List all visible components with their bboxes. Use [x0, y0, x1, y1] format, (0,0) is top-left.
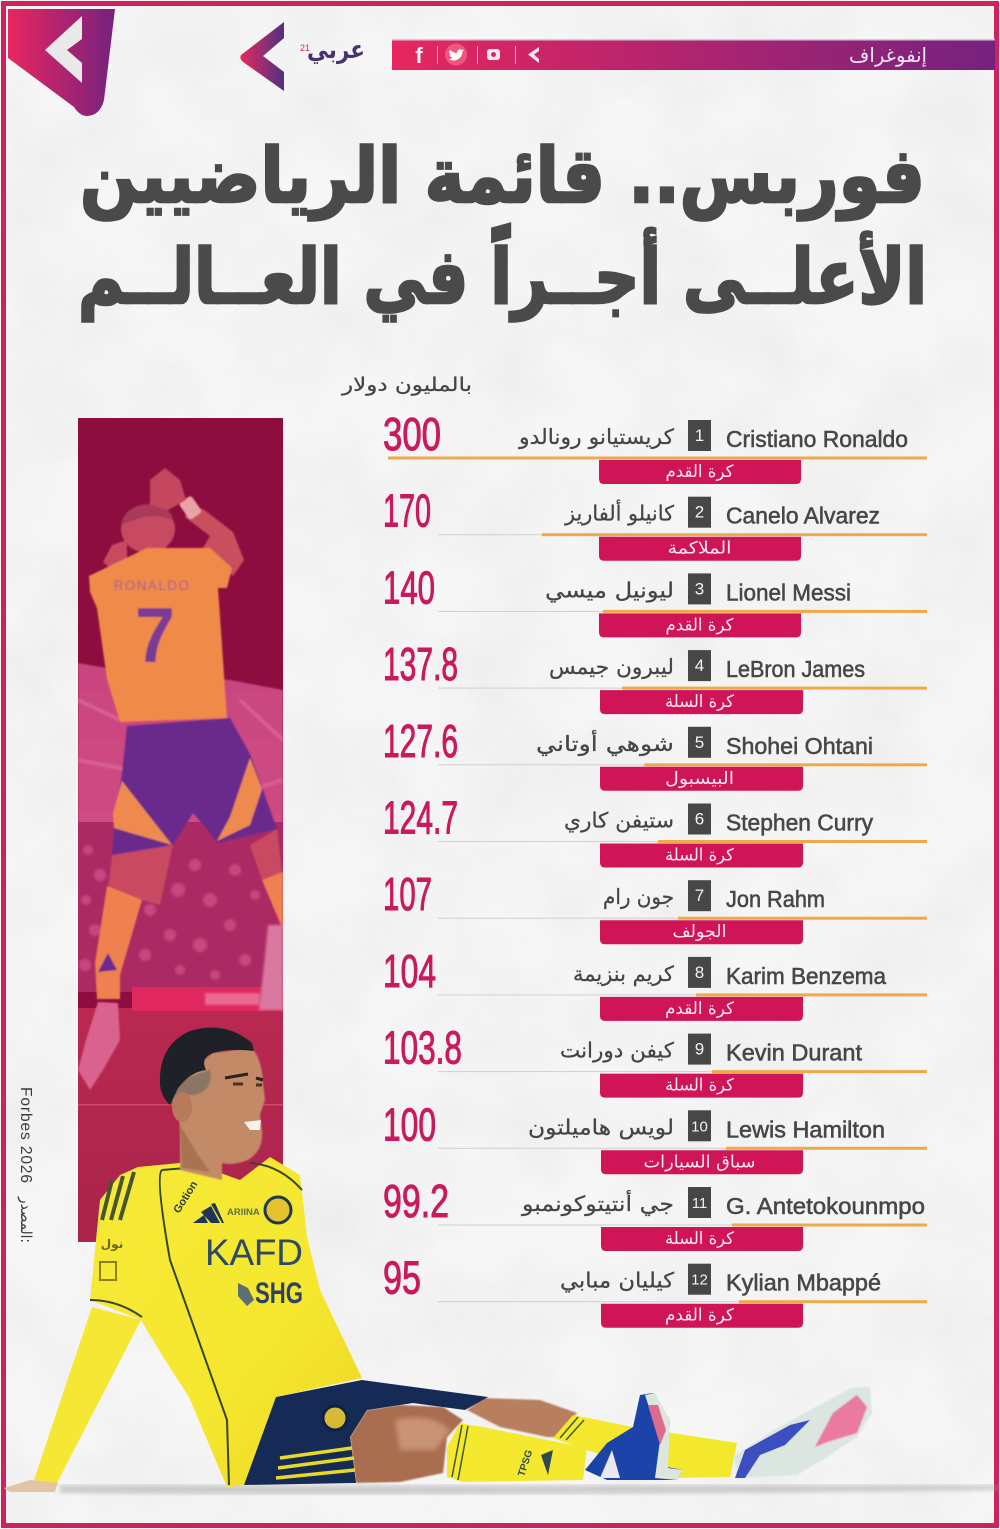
crowd — [78, 822, 283, 992]
sponsor marks: Gotion — [171, 1179, 200, 1216]
row 4: LeBron James — [726, 656, 865, 682]
row 8: كريم بنزيمة — [573, 962, 674, 987]
row 2: الملاكمة — [668, 539, 732, 559]
row 9: Kevin Durant — [726, 1040, 863, 1066]
panel: tinted photo of Ronaldo celebrating — [78, 418, 283, 1242]
brand logo: Arabi21 — [240, 22, 365, 91]
player: socks — [95, 872, 283, 999]
row 7: الجولف — [672, 922, 726, 942]
row 10: 10 — [691, 1118, 708, 1135]
row 5: Shohei Ohtani — [726, 733, 873, 759]
row 2: كانيلو ألفاريز — [564, 500, 674, 526]
player: head — [120, 515, 176, 552]
row 9: كرة السلة — [665, 1076, 735, 1096]
icon: youtube — [487, 49, 500, 60]
row 5: شوهي أوتاني — [536, 730, 674, 756]
row 3 — [383, 561, 927, 637]
row 11: 11 — [692, 1195, 707, 1212]
row 10: لويس هاميلتون — [528, 1115, 674, 1139]
row 1: 300 — [383, 408, 441, 460]
far boot — [733, 1387, 872, 1478]
player cut-out: Ronaldo sitting — [4, 1027, 1000, 1494]
row 2: 2 — [695, 503, 704, 522]
row 6: كرة السلة — [665, 846, 735, 866]
player: right arm — [185, 509, 244, 576]
row 4: كرة السلة — [665, 692, 735, 712]
brand logo: Arabi21: عربي — [307, 35, 365, 65]
player cut-out: Ronaldo sitting: ARIINA — [227, 1207, 260, 1218]
row 1: Cristiano Ronaldo — [726, 426, 908, 452]
hand — [4, 1480, 58, 1492]
sleeve patch: نول — [101, 1237, 123, 1252]
row 9: 103.8 — [383, 1022, 462, 1074]
row 11: كرة السلة — [665, 1229, 735, 1249]
player: left hand — [103, 540, 127, 568]
ear — [172, 1092, 192, 1122]
ground shadow — [60, 1485, 1000, 1494]
near boot — [585, 1393, 683, 1480]
banner — [132, 987, 283, 1011]
lower arm — [34, 1307, 141, 1483]
player: boot — [78, 1002, 120, 1090]
row 10: Lewis Hamilton — [726, 1116, 885, 1142]
ribbon label: إنفوغراف — [849, 43, 927, 68]
header ribbon — [392, 39, 995, 70]
player cut-out: Ronaldo sitting: TPSG — [516, 1448, 535, 1478]
row 8 — [383, 945, 927, 1021]
row 1: كرة القدم — [666, 462, 734, 482]
brand logo: Arabi21: 21 — [300, 43, 310, 53]
row 2: Canelo Alvarez — [726, 503, 880, 529]
far sock — [553, 1415, 737, 1478]
row 2: 170 — [383, 485, 431, 537]
celebrating player — [78, 468, 283, 1090]
player: shorts — [112, 718, 277, 855]
row 5: 127.6 — [383, 715, 458, 767]
player: legs — [108, 829, 283, 905]
row 1: كريستيانو رونالدو — [518, 425, 674, 449]
row 11: 99.2 — [383, 1175, 449, 1227]
row 11: جي أنتيتوكونمبو — [521, 1190, 674, 1216]
row 12: Kylian Mbappé — [726, 1270, 881, 1296]
near sock — [447, 1423, 587, 1482]
player cut-out: Ronaldo sitting: KAFD — [205, 1232, 303, 1273]
celebrating player: RONALDO — [114, 578, 190, 593]
icon: chevron logo — [528, 47, 539, 63]
jersey — [90, 1157, 362, 1487]
corner logo — [8, 9, 115, 116]
row 4: 137.8 — [383, 638, 458, 690]
row 11: G. Antetokounmpo — [726, 1193, 925, 1219]
stadium roof — [78, 663, 283, 830]
row 3: ليونيل ميسي — [545, 578, 674, 602]
row 9 — [383, 1022, 927, 1098]
row 1 — [383, 408, 927, 484]
row 1: 1 — [695, 426, 704, 445]
row 9: 9 — [695, 1040, 704, 1059]
hair — [160, 1027, 254, 1105]
row 3: 3 — [695, 579, 704, 598]
row 12: 95 — [383, 1252, 421, 1304]
brows and eyes — [225, 1074, 263, 1080]
row 5: 5 — [695, 733, 704, 752]
far leg — [467, 1398, 577, 1437]
row 7 — [383, 868, 927, 944]
row 10 — [383, 1098, 927, 1174]
row 7: Jon Rahm — [726, 886, 825, 912]
row 2 — [383, 485, 927, 561]
row 10: سباق السيارات — [644, 1152, 756, 1172]
far player — [259, 925, 283, 1010]
row 7: 107 — [383, 868, 432, 920]
icon: facebook: f — [415, 43, 423, 68]
row 12: 12 — [691, 1272, 708, 1289]
row 8: 104 — [383, 945, 436, 997]
row 7: جون رام — [603, 885, 674, 909]
row 4 — [383, 638, 927, 714]
hair fade — [170, 1070, 211, 1103]
near leg — [350, 1405, 463, 1483]
row 12 — [383, 1252, 927, 1328]
row 6: 6 — [695, 810, 704, 828]
mouth — [244, 1120, 261, 1130]
source credit — [17, 1087, 35, 1243]
row 6 — [383, 792, 927, 868]
ground — [78, 1008, 283, 1242]
player cut-out: Ronaldo sitting: SHG — [255, 1277, 303, 1310]
unit label: بالمليون دولار — [341, 374, 472, 396]
row 5 — [383, 715, 927, 791]
row 11 — [383, 1175, 927, 1251]
row 5: البيسبول — [665, 769, 734, 789]
row 10: 100 — [383, 1098, 436, 1150]
row 12: كيليان مبابي — [560, 1269, 674, 1293]
source credit: المصدر: — [17, 1196, 35, 1243]
row 6: ستيفن كاري — [564, 808, 674, 832]
player: jersey — [89, 548, 232, 722]
ranking table — [383, 408, 927, 1328]
row 4: 4 — [695, 656, 704, 675]
neck and face — [178, 1048, 265, 1180]
title — [78, 131, 927, 322]
row 3: 140 — [383, 561, 435, 613]
icon: twitter — [445, 44, 467, 66]
shorts — [244, 1380, 488, 1485]
row 9: كيفن دورانت — [560, 1039, 674, 1063]
row 8: 8 — [695, 963, 704, 982]
source credit: Forbes 2026 — [17, 1087, 34, 1183]
row 12: كرة القدم — [665, 1306, 735, 1326]
row 3: كرة القدم — [666, 615, 734, 635]
celebrating player: 7 — [135, 591, 175, 679]
row 8: كرة القدم — [665, 999, 735, 1019]
row 4: ليبرون جيمس — [549, 655, 674, 679]
row 6: Stephen Curry — [726, 810, 873, 836]
row 8: Karim Benzema — [726, 963, 886, 989]
row 7: 7 — [695, 886, 704, 905]
row 3: Lionel Messi — [726, 579, 851, 605]
row 6: 124.7 — [383, 792, 458, 844]
